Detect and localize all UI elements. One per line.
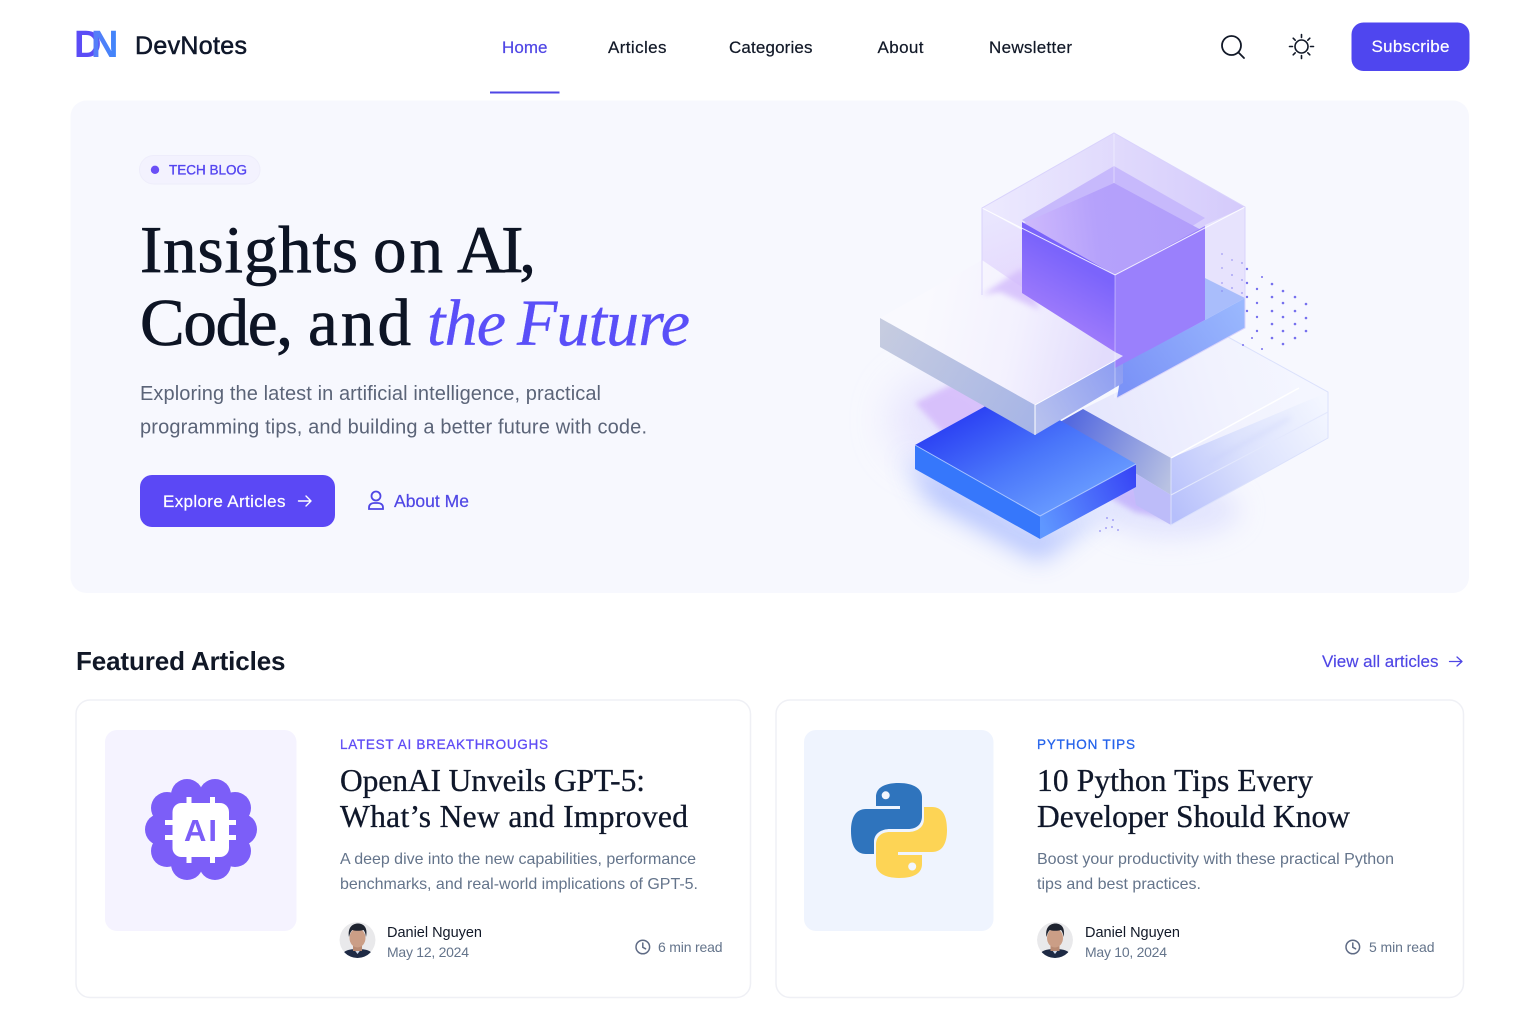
article summary: tips and best practices. [1037, 876, 1201, 893]
publish date: May 10, 2024 [1085, 944, 1167, 960]
article title [340, 763, 688, 834]
nav links: Categories [729, 38, 812, 57]
hero description: programming tips, and building a better future with code. [140, 416, 647, 438]
nav links: Newsletter [989, 38, 1072, 57]
card background [776, 700, 1464, 998]
subscribe button [1352, 22, 1470, 71]
hero background [70, 100, 1469, 593]
soft glow [890, 375, 1240, 560]
panel: hero [70, 100, 1469, 593]
card background [76, 700, 750, 998]
hero heading: and [308, 286, 411, 360]
logo mark: D [74, 24, 101, 66]
button: explore articles: Explore Articles [163, 492, 286, 511]
link: view all articles: View all articles [1322, 652, 1438, 671]
icon: AI chip cloud: AI [184, 813, 217, 848]
nav links [502, 38, 1072, 57]
right glass slab [1060, 337, 1328, 525]
panel: article card Python [776, 700, 1464, 998]
hero description [140, 383, 647, 438]
link: about me: About Me [394, 491, 469, 511]
hero heading: AI, [457, 213, 536, 287]
article title: OpenAI Unveils GPT-5: [340, 763, 645, 798]
category label: LATEST AI BREAKTHROUGHS [340, 737, 548, 752]
author name: Daniel Nguyen [387, 925, 482, 941]
subscribe button: Subscribe [1372, 37, 1450, 56]
dot pattern [1099, 253, 1307, 532]
author avatar [340, 922, 376, 960]
logo mark: N [91, 24, 118, 66]
category label: PYTHON TIPS [1037, 737, 1135, 752]
hero heading: Insights [140, 213, 358, 287]
icon: sun [1290, 34, 1314, 58]
hero heading [140, 213, 690, 360]
tag: tech blog: TECH BLOG [169, 162, 247, 178]
brand name: DevNotes [135, 32, 247, 60]
article summary [340, 851, 698, 893]
icon: search [1222, 36, 1244, 58]
purple floor shadow [915, 380, 1171, 520]
logo mark [74, 24, 118, 66]
outer glass cube back [982, 133, 1245, 398]
navigation bar [74, 22, 1470, 94]
button: explore articles [140, 475, 335, 527]
nav links: Articles [608, 38, 666, 57]
nav links: About [878, 38, 924, 57]
article summary [1037, 851, 1394, 893]
icon: AI chip cloud [145, 779, 257, 880]
article title: What’s New and Improved [340, 799, 688, 834]
icon: Python logo [851, 783, 947, 878]
publish date: May 12, 2024 [387, 944, 469, 960]
article summary: Boost your productivity with these practical Python [1037, 851, 1394, 868]
article title: Developer Should Know [1037, 799, 1350, 834]
inner purple cube [982, 133, 1245, 398]
white slab [880, 260, 1123, 435]
panel: article card OpenAI [76, 700, 750, 998]
read time: 6 min read [658, 939, 722, 955]
hero heading: on [373, 213, 443, 287]
blue slab [915, 392, 1136, 539]
thumbnail tile [105, 730, 296, 931]
tag: tech blog [140, 156, 260, 184]
thumbnail tile [804, 730, 994, 931]
author name: Daniel Nguyen [1085, 925, 1180, 941]
article title: 10 Python Tips Every [1037, 763, 1313, 798]
hero heading: Future [516, 287, 690, 360]
nav links: Home [502, 38, 548, 57]
hero description: Exploring the latest in artificial intelligence, practical [140, 383, 601, 405]
hero heading: the [427, 287, 506, 360]
section heading: featured articles: Featured Articles [76, 646, 286, 676]
read time: 5 min read [1369, 939, 1434, 955]
article summary: benchmarks, and real-world implications of GPT-5. [340, 876, 698, 893]
author avatar [1037, 922, 1073, 960]
article summary: A deep dive into the new capabilities, performance [340, 851, 696, 868]
active nav underline [490, 92, 560, 94]
hero heading: Code, [140, 286, 293, 360]
article title [1037, 763, 1350, 834]
hero illustration: isometric blocks [880, 133, 1328, 560]
